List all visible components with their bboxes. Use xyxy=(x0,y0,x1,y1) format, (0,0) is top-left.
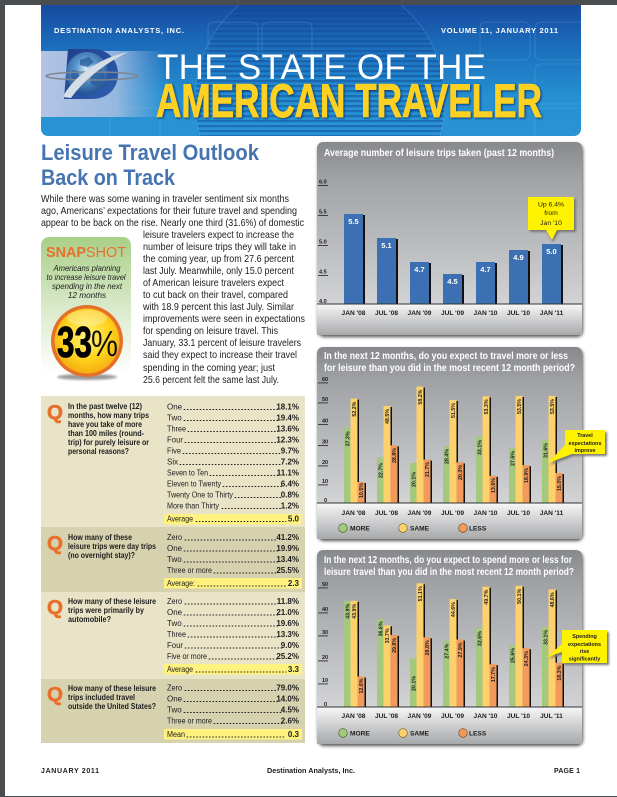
bars: JUL '09: 27.9% xyxy=(458,642,464,658)
answers: One xyxy=(167,402,183,412)
question text xyxy=(68,402,149,456)
x axis labels: JAN '10 xyxy=(474,510,498,517)
callout: spending expectations rise significantly: rise xyxy=(580,649,589,655)
article body text column: of American leisure travelers expect xyxy=(143,277,284,289)
article intro text: ago, Americans’ expectations for their future travel and spending xyxy=(41,205,297,217)
answers: 14.0% xyxy=(276,694,299,704)
x axis labels: JAN '09 xyxy=(408,510,432,517)
snapshot description: Americans planning xyxy=(53,264,121,273)
mean row xyxy=(164,729,302,740)
question text: have you take of more xyxy=(68,420,142,429)
question text: How many of these leisure xyxy=(68,597,156,606)
answers xyxy=(167,533,299,575)
bars: JUL '11: 33.1% xyxy=(544,630,550,645)
bars: JUL '08 xyxy=(377,406,399,503)
average row: Average xyxy=(167,665,193,674)
answers: Three xyxy=(167,630,186,639)
bars: JUL '09: 20.3% xyxy=(458,465,464,480)
bars: JUL '10: 53.5% xyxy=(517,399,523,414)
average row xyxy=(164,664,302,674)
y axis labels: 5.0 xyxy=(319,240,327,246)
x axis labels: JUL '08 xyxy=(375,713,398,720)
question text: trips included travel xyxy=(68,693,135,702)
x axis labels: JUL '08 xyxy=(375,510,398,517)
title line 1: THE STATE OF THE xyxy=(157,48,486,87)
bars: JAN '10: 53.3% xyxy=(484,399,490,414)
x axis labels: JAN '08 xyxy=(342,713,366,720)
answers: 9.7% xyxy=(281,446,299,456)
chart title: for leisure than you did in the most recent 12 month period? xyxy=(324,363,575,374)
legend: SAME xyxy=(410,730,430,738)
mean row: Mean xyxy=(167,730,185,739)
article body text column: said they expect to increase their travel xyxy=(143,349,297,361)
callout: travel expectations improve: expectations xyxy=(569,441,601,447)
answers xyxy=(167,684,299,726)
company name: DESTINATION ANALYSTS, INC. xyxy=(54,26,184,35)
answers: Four xyxy=(167,436,183,444)
answers: 12.3% xyxy=(276,436,299,444)
answers: 19.6% xyxy=(276,619,299,628)
panel: spend more or less chart xyxy=(317,550,609,746)
question text: How many of these xyxy=(68,533,132,542)
answers: 9.0% xyxy=(281,641,299,650)
x axis labels xyxy=(342,310,564,317)
footer: date: JANUARY 2011 xyxy=(41,768,100,775)
bars: JUL '09: 27.4% xyxy=(444,643,450,659)
question text: In the past twelve (12) xyxy=(68,402,142,411)
bars: JUL '08: 48.5% xyxy=(385,409,391,424)
answers: One xyxy=(167,544,183,553)
bars: JAN '09 xyxy=(410,387,432,503)
x axis labels: JAN '09 xyxy=(408,713,432,720)
y axis labels: 0 xyxy=(324,702,327,708)
bars: JAN '10: 13.6% xyxy=(491,478,497,493)
answers: Six xyxy=(167,458,178,466)
bars: JUL '09: 28.4% xyxy=(444,449,450,464)
bars: JAN '09: 28.8% xyxy=(425,640,431,655)
header banner xyxy=(41,5,581,136)
answers: Two xyxy=(167,706,182,714)
snapshot coin: 33 percent: % xyxy=(91,323,118,364)
question text: trip) for purely leisure or xyxy=(68,438,149,447)
bars: JUL '09 xyxy=(443,400,465,503)
bars: JAN '08 xyxy=(344,399,366,503)
chart title: In the next 12 months, do you expect to travel more or less xyxy=(324,351,568,362)
snapshot description: 12 months xyxy=(68,291,106,300)
bars: 4.5 xyxy=(447,277,458,286)
average row xyxy=(164,514,302,524)
callout: travel expectations improve: improve xyxy=(575,448,595,454)
legend: MORE xyxy=(350,730,370,738)
answers: Four xyxy=(167,641,183,650)
x axis labels: JAN '11 xyxy=(540,510,564,517)
answers: 6.4% xyxy=(281,480,299,488)
callout: spending expectations rise significantly xyxy=(547,630,609,665)
bars: JUL '10: 24.3% xyxy=(524,651,530,666)
chart title xyxy=(324,555,574,578)
bars: JUL '11: 48.6% xyxy=(550,592,556,607)
footer: company: Destination Analysts, Inc. xyxy=(267,766,355,775)
bars: JAN '11: 31.6% xyxy=(544,443,550,458)
article body text column: number of leisure trips they will take in xyxy=(143,241,296,253)
x axis labels: JUL '11 xyxy=(540,713,563,720)
bars: JUL '08: 29.8% xyxy=(392,638,398,653)
bars: JAN '11: 53.5% xyxy=(550,399,556,414)
callout: up 6.4%: from xyxy=(544,210,558,217)
question text: automobile? xyxy=(68,615,111,624)
mean row: 0.3 xyxy=(288,730,300,739)
answers: Five xyxy=(167,446,181,456)
answers: Eleven to Twenty xyxy=(167,480,221,488)
Q icon: Q xyxy=(47,532,63,555)
bars: JAN '10 xyxy=(476,587,498,707)
y axis labels: 50 xyxy=(322,582,328,588)
bars: JUL '11 xyxy=(542,589,564,707)
answers: Two xyxy=(167,414,182,422)
y axis labels xyxy=(318,582,328,708)
bars: JAN '08: 37.3% xyxy=(346,431,352,446)
bars: JUL '10: 25.6% xyxy=(510,648,516,663)
average row: Average xyxy=(167,514,193,524)
article body text column: with 18.9 percent this last July. Similar xyxy=(142,301,294,313)
bars: JAN '10: 49.7% xyxy=(484,589,490,605)
bars: JAN '08: 43.9% xyxy=(346,604,352,619)
volume and date: VOLUME 11, JANUARY 2011 xyxy=(441,26,558,35)
y axis labels: 20 xyxy=(322,460,328,466)
snapshot description: to increase leisure travel xyxy=(46,273,126,282)
legend: SAME xyxy=(410,526,430,532)
answers: Three xyxy=(167,424,186,434)
panel: travel more or less chart xyxy=(317,347,607,541)
x axis labels: JUL '10 xyxy=(507,713,530,720)
panel: question 3 xyxy=(41,592,305,679)
answers: Three or more xyxy=(167,566,212,575)
bars: JUL '09 xyxy=(443,599,465,707)
article body text column: January, 33.1 percent of leisure travelers xyxy=(143,337,301,349)
bars: 4.7 xyxy=(480,265,491,274)
callout: travel expectations improve: Travel xyxy=(577,433,593,439)
bars: JUL '08: 22.7% xyxy=(378,463,384,478)
bars: JUL '10: 50.1% xyxy=(517,589,523,604)
x axis labels xyxy=(342,510,564,517)
answers: Zero xyxy=(167,684,182,692)
logo: globe D xyxy=(46,49,138,99)
bars: JAN '09: 20.1% xyxy=(412,676,418,691)
bars: JUL '08: 33.7% xyxy=(385,628,391,643)
legend: LESS xyxy=(469,526,487,532)
article intro text: appear to be back on the rise. Nearly one third (31.6%) of domestic xyxy=(41,217,304,229)
chart title xyxy=(324,351,575,374)
bars: JUL '10: 18.9% xyxy=(524,468,530,483)
footer: page number: PAGE 1 xyxy=(554,768,581,775)
bars: JUL '08: 36.6% xyxy=(378,621,384,636)
bars: JUL '08: 28.8% xyxy=(392,448,398,463)
callout: spending expectations rise significantly: Spending xyxy=(572,634,597,640)
snapshot coin: 33 percent: 33 xyxy=(57,318,92,367)
answers: One xyxy=(167,608,183,617)
x axis labels: JUL '09 xyxy=(441,713,464,720)
article body text column: for spending on leisure travel. This xyxy=(143,325,278,337)
bars: JUL '10: 27.6% xyxy=(510,451,516,466)
answers: Twenty One to Thirty xyxy=(167,490,233,500)
x axis labels: JAN '11 xyxy=(540,310,564,317)
question text: trips were primarily by xyxy=(68,606,144,615)
article body text column xyxy=(142,229,305,386)
bars: JUL '09: 51.5% xyxy=(451,403,457,418)
average row xyxy=(164,578,302,588)
bars: JAN '09: 21.7% xyxy=(425,462,431,477)
article body text column: improvements were seen in expectations xyxy=(143,313,305,325)
bars: JUL '08 xyxy=(377,618,399,707)
y axis labels: 30 xyxy=(322,440,328,446)
article body text column: leisure travelers expect to increase the xyxy=(143,229,294,241)
article body text column: last July. Meanwhile, only 15.0 percent xyxy=(143,265,294,277)
answers: 11.1% xyxy=(277,468,299,478)
x axis labels: JAN '09 xyxy=(408,310,432,317)
callout: up 6.4%: Up 6.4% xyxy=(538,202,564,208)
bars: JAN '09: 20.1% xyxy=(412,472,418,487)
answers: 13.4% xyxy=(276,555,299,564)
average row: 5.0 xyxy=(288,514,300,524)
bars: JAN '09 xyxy=(410,583,432,707)
answers: Seven to Ten xyxy=(167,468,208,478)
chart title: Average number of leisure trips taken (past 12 months) xyxy=(324,148,554,159)
answers xyxy=(167,402,299,510)
question text xyxy=(68,684,156,711)
answers: 11.8% xyxy=(277,597,299,606)
x axis labels: JUL '10 xyxy=(507,310,530,317)
bars: 5.1 xyxy=(381,241,392,250)
panel: question 2 xyxy=(41,527,305,592)
answers: Five or more xyxy=(167,652,207,661)
question text: months, how many trips xyxy=(68,411,149,420)
bars: JAN '11: 15.0% xyxy=(557,476,563,491)
article body text column: to cut back on their travel, compared xyxy=(143,289,288,301)
bars: JAN '10: 32.6% xyxy=(478,631,484,646)
y axis labels: 40 xyxy=(322,418,328,424)
legend xyxy=(339,729,487,738)
answers: 13.6% xyxy=(276,424,299,434)
answers: Two xyxy=(167,555,182,564)
legend xyxy=(339,524,487,532)
answers: 18.1% xyxy=(276,402,299,412)
answers: 7.2% xyxy=(281,458,299,466)
y axis labels: 5.5 xyxy=(319,210,327,216)
panel: average leisure trips chart xyxy=(317,142,583,337)
legend: MORE xyxy=(350,526,370,532)
y axis labels: 0 xyxy=(324,498,327,504)
chart title: leisure travel than you did in the most recent 12 month period? xyxy=(324,567,574,578)
question text xyxy=(68,597,156,624)
answers: Two xyxy=(167,619,182,628)
answers: More than Thirty xyxy=(167,502,219,510)
bars: JUL '10 xyxy=(509,396,531,503)
y axis labels: 4.0 xyxy=(319,299,327,305)
legend: LESS xyxy=(469,730,487,738)
Q icon: Q xyxy=(47,401,63,424)
panel: snapshot xyxy=(41,237,131,380)
answers: 25.2% xyxy=(276,652,299,661)
bars: JAN '10: 17.7% xyxy=(491,667,497,682)
answers: 41.2% xyxy=(276,533,299,542)
answers: Zero xyxy=(167,597,182,606)
average row: 3.3 xyxy=(288,665,300,674)
question text xyxy=(68,533,156,560)
x axis labels: JAN '10 xyxy=(474,310,498,317)
x axis labels: JUL '10 xyxy=(507,510,530,517)
bars: JUL '10 xyxy=(509,586,531,707)
article body text column: the coming year, up from 27.6 percent xyxy=(143,253,294,265)
x axis labels: JUL '09 xyxy=(441,510,464,517)
average row: 2.3 xyxy=(288,579,300,588)
y axis labels: 40 xyxy=(322,607,328,613)
question text: (no overnight stay)? xyxy=(68,551,135,560)
panel: question 1 xyxy=(41,396,305,527)
answers: Three or more xyxy=(167,716,212,726)
question text: How many of these leisure xyxy=(68,684,156,693)
x axis labels: JAN '08 xyxy=(342,310,366,317)
callout: up 6.4% xyxy=(528,197,576,242)
answers: 2.6% xyxy=(281,716,299,726)
article heading: Back on Track xyxy=(41,165,175,190)
bars: JUL '11: 18.3% xyxy=(557,665,563,681)
article body text column: spending in the coming year; just xyxy=(143,362,275,374)
y axis labels: 50 xyxy=(322,397,328,403)
bars: JAN '09: 51.1% xyxy=(418,586,424,601)
x axis labels: JUL '09 xyxy=(441,310,464,317)
answers: 4.5% xyxy=(281,706,299,714)
bars: JAN '10: 33.1% xyxy=(478,440,484,455)
question text: outside the United States? xyxy=(68,702,156,711)
answers: 0.8% xyxy=(281,490,299,500)
answers: 21.0% xyxy=(276,608,299,617)
chart title: In the next 12 months, do you expect to spend more or less for xyxy=(324,555,572,566)
callout: up 6.4%: Jan '10 xyxy=(540,220,562,227)
y axis labels xyxy=(318,377,328,504)
Q icon: Q xyxy=(47,596,63,619)
bars: JAN '08 xyxy=(344,601,366,707)
bars: JAN '09: 58.2% xyxy=(418,389,424,405)
snapshot heading: SNAPSHOT xyxy=(46,244,126,261)
y axis labels: 30 xyxy=(322,630,328,636)
answers: 25.5% xyxy=(276,566,299,575)
bars: JAN '08: 12.6% xyxy=(359,678,365,694)
average row: Average: xyxy=(167,579,195,588)
answers: 13.3% xyxy=(276,630,299,639)
answers: 19.4% xyxy=(276,414,299,422)
bars: 5.5 xyxy=(348,217,359,226)
x axis labels: JAN '08 xyxy=(342,510,366,517)
callout: spending expectations rise significantly: expectations xyxy=(568,642,601,648)
article heading xyxy=(41,140,259,190)
callout: travel expectations improve xyxy=(548,430,607,465)
question text: personal reasons? xyxy=(68,447,129,456)
y axis labels: 60 xyxy=(322,377,328,383)
bars: JAN '08: 43.9% xyxy=(352,604,358,619)
snapshot description xyxy=(46,264,126,300)
Q icon: Q xyxy=(47,683,63,706)
answers: One xyxy=(167,694,183,704)
bars: JUL '09: 44.6% xyxy=(451,602,457,617)
question text: than 100 miles (round- xyxy=(68,429,144,438)
answers: Zero xyxy=(167,533,182,542)
snapshot description: spending in the next xyxy=(52,282,123,291)
bars: JAN '10 xyxy=(476,396,498,503)
y axis labels: 10 xyxy=(322,479,328,485)
bars: JAN '08: 52.2% xyxy=(352,401,358,417)
bars: JAN '11 xyxy=(542,396,564,503)
answers xyxy=(167,597,299,661)
snapshot coin: 33 percent xyxy=(51,305,123,380)
answers: 79.0% xyxy=(276,684,299,692)
x axis labels: JUL '08 xyxy=(375,310,398,317)
x axis labels: JAN '10 xyxy=(474,713,498,720)
y axis labels: 20 xyxy=(322,655,328,661)
answers: 1.2% xyxy=(281,502,299,510)
bars: 4.7 xyxy=(414,265,425,274)
y axis labels: 10 xyxy=(322,678,328,684)
panel: question 4 xyxy=(41,679,305,743)
article intro text: While there was some waning in traveler sentiment six months xyxy=(41,193,289,205)
callout: spending expectations rise significantly: significantly xyxy=(569,656,600,662)
bars: 4.9 xyxy=(513,253,524,262)
bars: 5.0 xyxy=(546,247,557,256)
article intro text xyxy=(41,193,304,229)
bars xyxy=(344,214,563,304)
x axis labels xyxy=(342,713,563,720)
answers: 19.9% xyxy=(276,544,299,553)
y axis labels xyxy=(318,180,328,305)
bars: JAN '08: 10.5% xyxy=(359,483,365,498)
article heading: Leisure Travel Outlook xyxy=(41,140,259,165)
article body text column: 25.6 percent felt the same last July. xyxy=(143,374,279,386)
question text: leisure trips were day trips xyxy=(68,542,156,551)
y axis labels: 6.0 xyxy=(319,180,327,186)
y axis labels: 4.5 xyxy=(319,270,327,276)
